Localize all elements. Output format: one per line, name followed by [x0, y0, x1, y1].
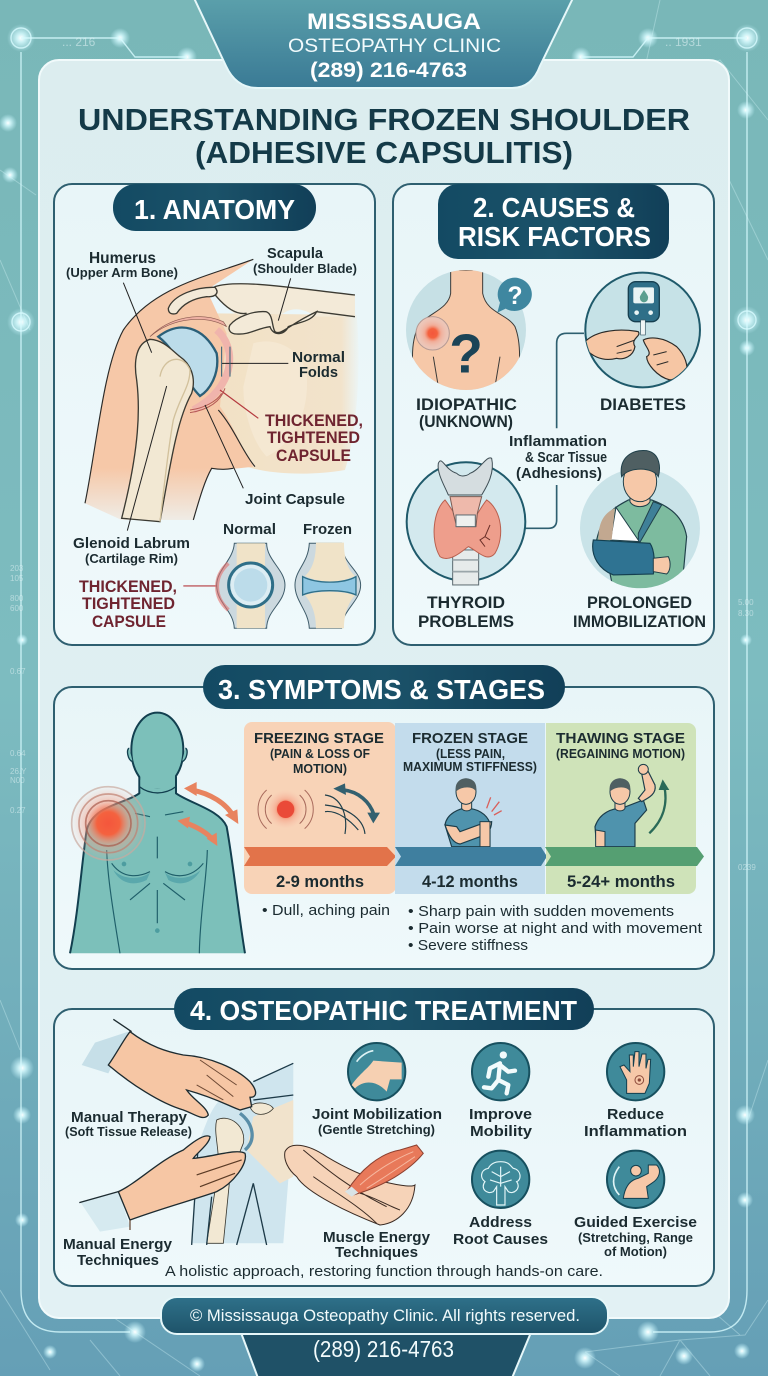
symptom bullets [262, 902, 703, 954]
heading: causes: RISK FACTORS [458, 221, 651, 252]
causes labels: Inflammation [509, 433, 607, 450]
anatomy labels: Normal [292, 349, 345, 366]
icon: thyroid [407, 458, 525, 585]
stage: frozen: FROZEN STAGE [412, 730, 528, 747]
title: (ADHESIVE CAPSULITIS) [195, 135, 573, 170]
stage: thawing: THAWING STAGE [556, 730, 685, 747]
heading: anatomy [113, 184, 316, 231]
treatment labels: Root Causes [453, 1231, 548, 1248]
heading: anatomy: 1. ANATOMY [134, 194, 295, 225]
treatment labels: Techniques [335, 1244, 418, 1261]
manual therapy illustration [79, 1019, 293, 1245]
anatomy labels: Folds [299, 364, 338, 381]
stage: freezing: MOTION) [293, 762, 347, 776]
icon: idiopathic body: ? [449, 323, 483, 385]
header banner: OSTEOPATHY CLINIC [288, 36, 501, 57]
anatomy labels: CAPSULE [92, 612, 166, 631]
causes labels: (Adhesions) [516, 465, 602, 482]
causes labels: IMMOBILIZATION [573, 612, 706, 631]
treatment labels: Techniques [77, 1252, 159, 1269]
stage: frozen: MAXIMUM STIFFNESS) [403, 760, 537, 774]
icon: idiopathic body [406, 270, 532, 393]
anatomy labels: THICKENED, [79, 577, 177, 596]
background: N00 [10, 776, 25, 785]
background: 26.Y [10, 767, 27, 776]
background: 0.64 [10, 749, 26, 758]
title [78, 102, 690, 170]
treatment labels: Joint Mobilization [312, 1106, 442, 1123]
heading: causes: 2. CAUSES & [473, 192, 635, 223]
treatment labels: Guided Exercise [574, 1214, 697, 1231]
stage: thawing: (REGAINING MOTION) [556, 747, 685, 761]
symptom bullets: • Dull, aching pain [262, 902, 390, 919]
stage: frozen: (LESS PAIN, [436, 747, 505, 761]
anatomy labels: Normal [223, 521, 276, 538]
title: UNDERSTANDING FROZEN SHOULDER [78, 102, 690, 137]
background: 800 [10, 594, 24, 603]
footer [161, 1297, 608, 1376]
background: 8.30 [738, 609, 754, 618]
tagline: A holistic approach, restoring function through hands-on care. [165, 1263, 603, 1280]
header banner: MISSISSAUGA [307, 9, 481, 34]
muscle energy illustration [285, 1145, 423, 1225]
causes labels: PROLONGED [587, 593, 692, 612]
stage: freezing: FREEZING STAGE [254, 730, 384, 747]
icon: hand with inflammation [620, 1052, 651, 1093]
anatomy labels: CAPSULE [276, 446, 351, 465]
stage: frozen: 4-12 months [422, 872, 518, 891]
anatomy labels: Frozen [303, 521, 352, 538]
icon: root cause tree [482, 1162, 520, 1205]
treatment labels [63, 1106, 697, 1269]
causes labels: THYROID [427, 593, 505, 612]
stage: thawing: 5-24+ months [567, 872, 675, 891]
causes labels [416, 395, 706, 631]
anatomy labels: THICKENED, [265, 411, 363, 430]
treatment labels: (Stretching, Range [578, 1230, 693, 1245]
background: 203 [10, 564, 24, 573]
stage: freezing: 2-9 months [276, 872, 364, 891]
heading: symptoms: 3. SYMPTOMS & STAGES [218, 674, 545, 705]
treatment icons [348, 1043, 664, 1208]
anatomy labels: Glenoid Labrum [73, 535, 190, 552]
panel: osteopathic treatment [54, 988, 714, 1286]
background: 0.67 [10, 667, 26, 676]
anatomy labels: Joint Capsule [245, 491, 345, 508]
shoulder anatomy illustration [85, 259, 359, 586]
causes labels: & Scar Tissue [525, 449, 607, 466]
header banner [194, 0, 573, 88]
treatment labels: Reduce [607, 1106, 664, 1123]
symptom bullets: • Sharp pain with sudden movements [408, 903, 674, 920]
treatment labels: Address [469, 1214, 532, 1231]
treatment labels: Inflammation [584, 1123, 687, 1140]
treatment labels: Manual Energy [63, 1236, 173, 1253]
heading: treatment: 4. OSTEOPATHIC TREATMENT [190, 995, 577, 1026]
body figure with pain [70, 713, 245, 953]
background: 105 [10, 574, 24, 583]
stage: thawing [545, 723, 704, 894]
header banner: (289) 216-4763 [310, 59, 467, 82]
causes labels: PROBLEMS [418, 612, 514, 631]
icon: running person [484, 1051, 515, 1093]
background: 5.00 [738, 598, 754, 607]
icon: joint mobilization [352, 1051, 402, 1092]
panel: causes and risk factors [393, 184, 714, 645]
anatomy labels: Humerus [89, 250, 156, 267]
icon: guided exercise [614, 1165, 659, 1198]
icon: prolonged immobilization [580, 450, 700, 590]
background: 0239 [738, 863, 756, 872]
normal vs frozen joints [217, 543, 361, 628]
heading: symptoms [203, 665, 565, 709]
treatment labels: Mobility [470, 1123, 533, 1140]
treatment labels: (Soft Tissue Release) [65, 1124, 192, 1139]
background: .. 1931 [665, 35, 702, 49]
background: 0.27 [10, 806, 26, 815]
anatomy labels [66, 245, 363, 631]
background: ... 216 [62, 35, 96, 49]
connector lines [510, 333, 584, 528]
treatment labels: Manual Therapy [71, 1109, 188, 1126]
causes labels: IDIOPATHIC [416, 395, 517, 414]
stage: freezing: (PAIN & LOSS OF [270, 747, 370, 761]
anatomy labels: Scapula [267, 245, 324, 262]
anatomy labels: (Upper Arm Bone) [66, 265, 178, 280]
treatment labels: Improve [469, 1106, 532, 1123]
stage: freezing [244, 722, 396, 894]
panel: anatomy [54, 184, 375, 645]
heading: causes [438, 184, 669, 259]
background: 600 [10, 604, 24, 613]
icon: diabetes glucose meter [585, 273, 700, 387]
anatomy labels: TIGHTENED [267, 428, 360, 447]
anatomy labels: (Shoulder Blade) [253, 261, 357, 276]
symptom bullets: • Severe stiffness [408, 937, 528, 954]
treatment labels: Muscle Energy [323, 1229, 431, 1246]
causes labels: (UNKNOWN) [419, 412, 513, 431]
treatment labels: (Gentle Stretching) [318, 1122, 435, 1137]
panel: symptoms and stages [54, 665, 714, 969]
stage: frozen [395, 723, 547, 894]
anatomy labels: TIGHTENED [82, 594, 175, 613]
anatomy labels: (Cartilage Rim) [85, 551, 178, 566]
footer: © Mississauga Osteopathy Clinic. All rights reserved. [190, 1306, 580, 1325]
causes labels: DIABETES [600, 395, 686, 414]
icon: idiopathic body: ? [507, 283, 523, 310]
symptom bullets: • Pain worse at night and with movement [408, 920, 703, 937]
footer: (289) 216-4763 [313, 1336, 454, 1362]
treatment labels: of Motion) [604, 1244, 667, 1259]
